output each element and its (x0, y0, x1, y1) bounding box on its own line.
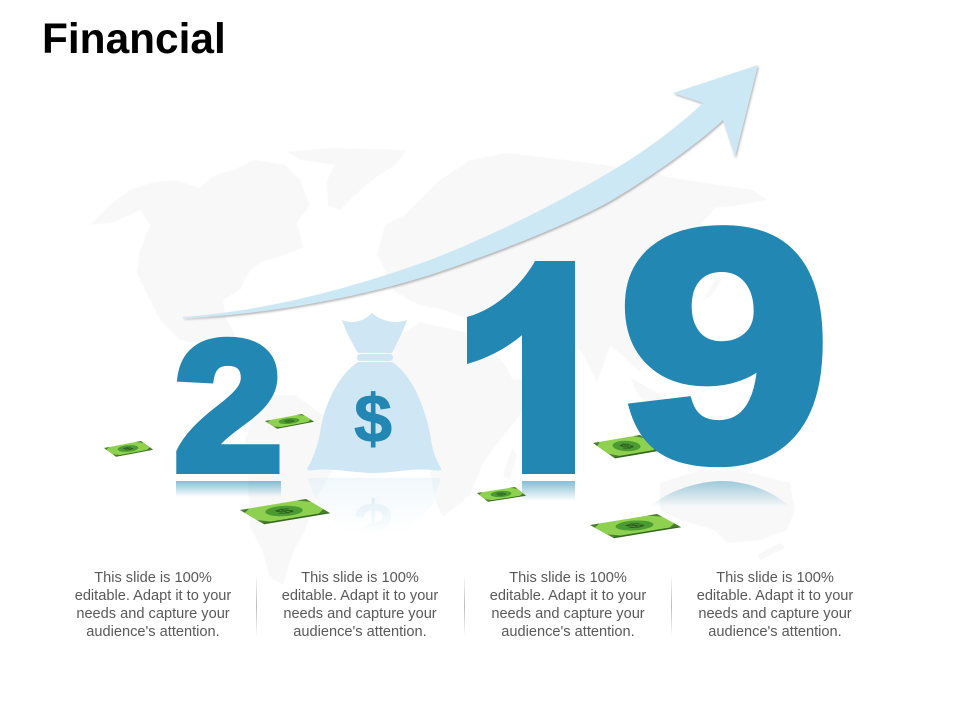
text block 1: editable. Adapt it to your (75, 588, 231, 604)
south america (245, 395, 340, 585)
eurasia (377, 153, 767, 383)
banknote left (104, 441, 153, 457)
banknote by the 1 (477, 487, 526, 502)
australia (660, 470, 795, 543)
banknote behind the 9 (593, 435, 662, 458)
text block 3: This slide is 100% (509, 570, 627, 586)
banknote behind the 9: $ (616, 442, 638, 451)
text block 2: needs and capture your (283, 606, 437, 622)
text block 2 (282, 570, 438, 640)
north america (90, 160, 310, 385)
text block 4: audience's attention. (708, 624, 842, 640)
digit 2: 2 (174, 305, 283, 509)
text block 2: audience's attention. (293, 624, 427, 640)
banknote large right (590, 514, 681, 538)
title: Financial (42, 15, 226, 62)
text block 1 (75, 570, 231, 640)
world map background (90, 148, 795, 585)
text block 3: audience's attention. (501, 624, 635, 640)
money bag icon (307, 313, 441, 473)
digit 1: 1 (442, 205, 624, 538)
growth arrow (183, 65, 758, 318)
reflection of money bag: $ (354, 488, 392, 564)
banknote by the 2 (265, 414, 314, 429)
reflection of digit 1 (522, 481, 575, 501)
text block 1: audience's attention. (86, 624, 220, 640)
text block 4: editable. Adapt it to your (697, 588, 853, 604)
text block 1: needs and capture your (76, 606, 230, 622)
reflection of digit 9 (650, 481, 790, 507)
text block 4 (697, 570, 853, 640)
banknote by the 1: $ (494, 491, 508, 497)
reflection of digit 2 (176, 481, 281, 497)
text block 3: editable. Adapt it to your (490, 588, 646, 604)
text block 4: This slide is 100% (716, 570, 834, 586)
banknote by the 2: $ (282, 419, 297, 424)
banknote large left: $ (271, 506, 299, 516)
banknote left: $ (121, 446, 136, 451)
dollar sign: $ (354, 381, 392, 457)
tasmania and islands (630, 277, 785, 560)
reflection of money bag (307, 478, 441, 564)
banknote large left (240, 499, 330, 524)
text block 2: This slide is 100% (301, 570, 419, 586)
madagascar (503, 447, 517, 480)
digit 9: 9 (619, 164, 830, 527)
text block 4: needs and capture your (698, 606, 852, 622)
africa (382, 322, 540, 517)
text block 3 (490, 570, 646, 640)
text block 3: needs and capture your (491, 606, 645, 622)
banknote large right: $ (621, 521, 649, 530)
text block 2: editable. Adapt it to your (282, 588, 438, 604)
greenland (287, 148, 407, 210)
text block 1: This slide is 100% (94, 570, 212, 586)
